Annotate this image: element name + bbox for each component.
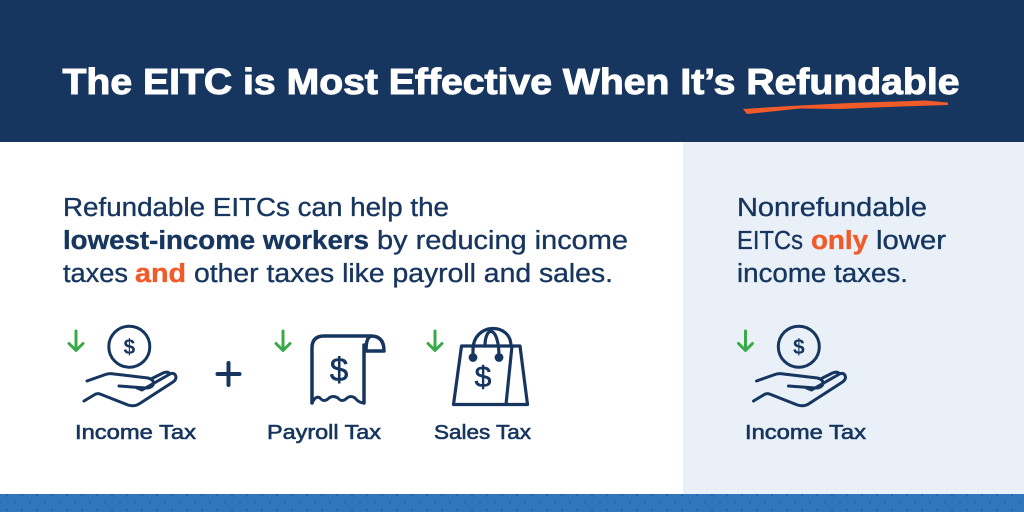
icon: income tax hand and coin: $ xyxy=(793,336,805,359)
label: payroll tax: Payroll Tax xyxy=(267,422,381,444)
label: income tax: Income Tax xyxy=(745,422,866,444)
icon: income tax hand and coin xyxy=(69,326,176,406)
label: income tax: Income Tax xyxy=(75,422,196,444)
icon: income tax hand and coin: $ xyxy=(123,336,135,359)
plus sign xyxy=(218,363,240,385)
panel: header band xyxy=(0,0,1024,142)
refundable description: taxes xyxy=(63,260,128,288)
title: The EITC is Most Effective When It’s Refundable xyxy=(62,61,960,102)
refundable description xyxy=(63,194,628,288)
footer band xyxy=(0,494,1024,512)
icon: payroll tax receipt: $ xyxy=(330,351,348,388)
refundable description: lowest-income workers xyxy=(63,227,369,255)
nonrefundable description: income taxes. xyxy=(737,260,908,288)
label: sales tax: Sales Tax xyxy=(434,422,531,444)
nonrefundable description: EITCs xyxy=(737,227,803,255)
refundable description: other taxes like payroll and sales. xyxy=(194,260,613,288)
icon: payroll tax receipt xyxy=(276,331,384,403)
refundable description: Refundable EITCs can help the xyxy=(63,194,449,222)
icon: income tax hand and coin xyxy=(738,326,846,406)
icon: sales tax shopping bag: $ xyxy=(475,361,492,394)
icon: sales tax shopping bag xyxy=(428,328,528,404)
nonrefundable description: only xyxy=(811,227,869,255)
panel: nonrefundable EITCs xyxy=(683,142,1024,494)
nonrefundable description: lower xyxy=(876,227,947,255)
refundable description: by reducing income xyxy=(377,227,628,255)
title underline xyxy=(743,100,948,114)
panel: refundable EITCs xyxy=(0,142,683,494)
nonrefundable description xyxy=(737,194,947,288)
refundable description: and xyxy=(135,260,186,288)
nonrefundable description: Nonrefundable xyxy=(737,194,927,222)
